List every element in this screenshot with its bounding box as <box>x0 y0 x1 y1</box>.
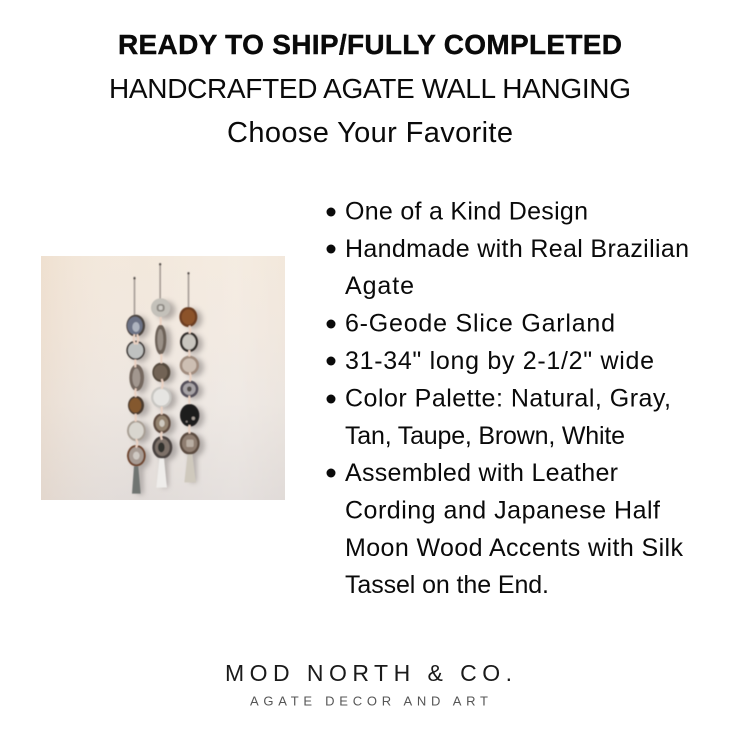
subtitle: handcrafted agate wall hanging: HANDCRAFTED AGATE WALL HANGING <box>109 73 631 104</box>
strand: middle agate garland <box>151 263 172 488</box>
bullet: real brazilian agate <box>326 235 689 300</box>
bullet: assembly: Tassel on the End. <box>345 571 549 599</box>
title: ready to ship: READY TO SHIP/FULLY COMPLETED <box>118 29 622 60</box>
bullet: colour palette <box>326 384 671 450</box>
heading: choose your favorite: Choose Your Favorite <box>227 117 513 149</box>
bullet: one of a kind: One of a Kind Design <box>345 198 588 226</box>
bullet: assembly: Assembled with Leather <box>345 459 618 487</box>
bullet list: product features <box>326 198 689 599</box>
strand: left agate garland <box>126 277 146 494</box>
bullet: assembly: Moon Wood Accents with Silk <box>345 534 684 562</box>
footer tagline: AGATE DECOR AND ART <box>250 694 488 709</box>
bullet: assembly <box>326 459 684 599</box>
strand: right agate garland <box>179 272 200 482</box>
bullet: colour palette: Tan, Taupe, Brown, White <box>345 422 625 450</box>
bullet: assembly: Cording and Japanese Half <box>345 496 660 524</box>
bullet: dimensions: 31-34" long by 2-1/2" wide <box>345 347 654 375</box>
bullet: garland: 6-Geode Slice Garland <box>345 310 615 338</box>
bullet: real brazilian agate: Handmade with Real Brazilian <box>345 235 689 263</box>
bullet: colour palette: Color Palette: Natural, Gray, <box>345 384 671 412</box>
photo: three agate wall hangings <box>41 256 285 500</box>
footer brand name: MOD NORTH & CO. <box>225 660 512 686</box>
bullet: real brazilian agate: Agate <box>345 272 414 300</box>
shadows: cast on wall <box>132 301 205 494</box>
